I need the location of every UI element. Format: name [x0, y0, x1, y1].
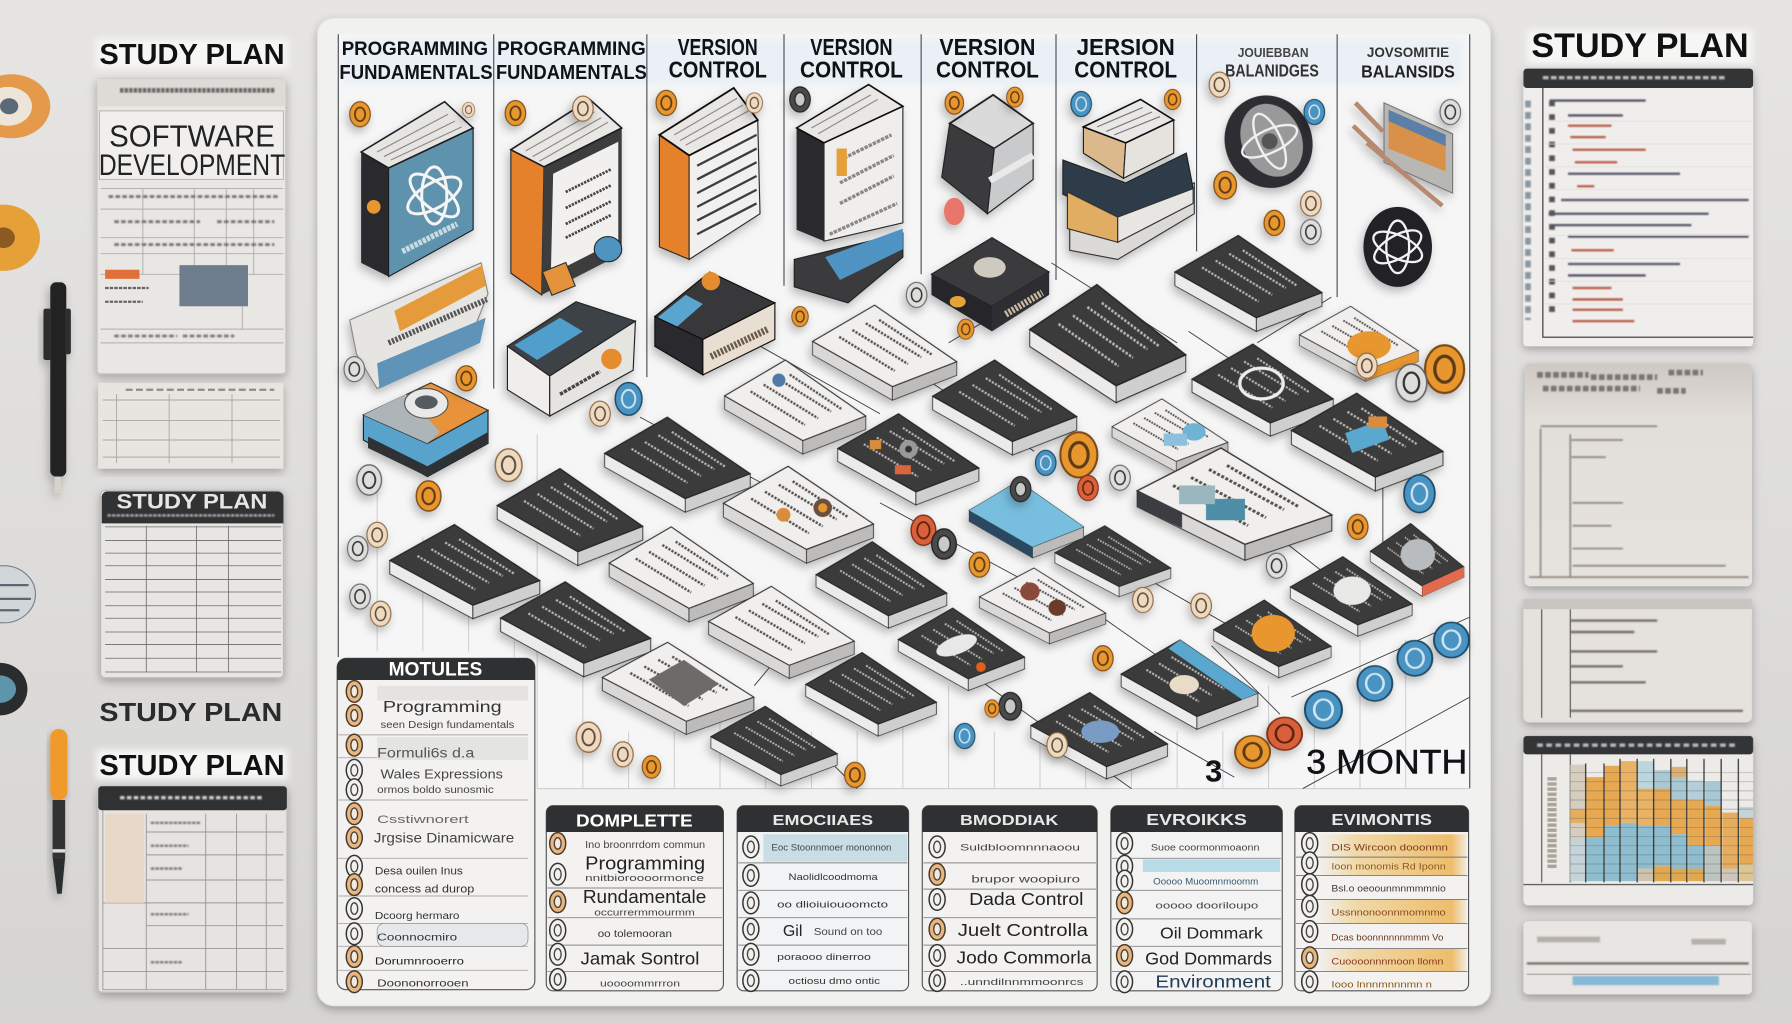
- list panel: modules: Dorumnrooerro: [375, 957, 464, 968]
- slab 18: [1214, 600, 1331, 678]
- list panel: modules: concess ad durop: [375, 884, 474, 896]
- right sidebar: [1523, 27, 1753, 994]
- slab 6: [933, 360, 1077, 455]
- header: bmoddak: BMODDIAK: [960, 813, 1059, 829]
- card: r3 faded: [1523, 599, 1752, 722]
- list panel: emodiaes: Sound on too: [814, 927, 883, 938]
- bars: [1570, 759, 1753, 882]
- icon: black pen: [43, 282, 71, 493]
- card: software development: [97, 79, 286, 374]
- list panel: evimontis: [1295, 806, 1469, 993]
- card: r2 faded: [1525, 363, 1752, 586]
- card: r4 stacked bars: [1523, 736, 1753, 905]
- label: 3 month: 3 MONTH: [1306, 744, 1467, 782]
- heading: study plan 1: STUDY PLAN: [99, 39, 285, 71]
- list panel: emodiaes: Naolidlcoodmoma: [789, 872, 879, 882]
- list panel: evimontis: Iooo lnnnmnnnmn n: [1331, 979, 1432, 989]
- box: blue top: [507, 302, 635, 416]
- column headings: CONTROL: [936, 57, 1039, 83]
- header: evroikks: EVROIKKS: [1146, 812, 1247, 829]
- slab 3: [605, 417, 750, 512]
- list panel: modules: Dcoorg hermaro: [375, 911, 460, 922]
- heading: study plan right: STUDY PLAN: [1531, 27, 1749, 65]
- list panel: evimontis: Dcas boonnnnnnmmm Vo: [1331, 933, 1443, 943]
- list panel: emodiaes: oo dlioiuiouoomcto: [777, 899, 888, 909]
- box: orange blue bundle: [350, 263, 488, 389]
- list panel: emodiaes: Gil: [783, 923, 802, 940]
- icon: disc: [1209, 81, 1328, 203]
- slab 23 white: [602, 642, 754, 734]
- list panel: emodiaes: poraooo dinerroo: [777, 952, 871, 962]
- header: evimontis: EVIMONTIS: [1331, 812, 1432, 829]
- screenshot: [179, 265, 248, 306]
- list panel: bmoddak: Jodo Commorla: [957, 947, 1092, 967]
- list panel: modules: Desa ouilen Inus: [375, 865, 463, 877]
- column headings: BALANSIDS: [1361, 62, 1455, 82]
- icon: pebble grey: [0, 566, 35, 623]
- row text: Programming: [585, 853, 705, 874]
- row text: Suoe coormonmoaonn: [1151, 842, 1259, 852]
- slab 12: [898, 608, 1025, 691]
- slab 2: [497, 469, 643, 566]
- card: r1 list: [1523, 69, 1753, 346]
- list panel: domplette: nnitbioroooormonce: [585, 873, 704, 883]
- pebbles: [344, 72, 1469, 787]
- slab 8: [1175, 235, 1322, 331]
- list panel: evroikks: ooooo dooriloupo: [1155, 901, 1258, 911]
- heading: study plan 3: STUDY PLAN: [99, 750, 285, 782]
- list panel: modules: Formuli6s d.a: [377, 746, 475, 761]
- list panel: evimontis: Ussnnonoonnmomnmo: [1331, 907, 1446, 917]
- list panel: evimontis: Ioon monomis Rd Iponn: [1331, 862, 1446, 872]
- list panel: modules: Csstiwnorert: [377, 814, 470, 826]
- list panel: domplette: Rundamentale: [583, 886, 706, 907]
- slab 16: [1031, 693, 1168, 779]
- slab 21 white: [609, 527, 753, 622]
- slab 31 blue: [969, 481, 1084, 558]
- heading: programming fundamentals: PROGRAMMING: [342, 38, 488, 60]
- list panel: evimontis: Cuoooonnnmoon llomn: [1331, 957, 1443, 967]
- slab 1: [390, 525, 540, 619]
- stack: blue orange books: [363, 383, 488, 477]
- heading: version control: VERSION: [678, 34, 758, 60]
- list panel: bmoddak: ..unndilnnmmoonrcs: [960, 977, 1084, 987]
- list panel: domplette: uoooommrrron: [600, 978, 680, 988]
- list panel: evimontis: Bsl.o oeoounmnmmmnio: [1331, 883, 1446, 893]
- list panel: evroikks: Ooooo Muoomnmoomm: [1153, 877, 1258, 887]
- icon: atom pebble: [1363, 207, 1432, 287]
- heading: blurred 7: JOUIEBBAN: [1238, 46, 1309, 60]
- heading: version control 2: VERSION: [810, 34, 893, 60]
- lower pebbles: [576, 432, 1368, 787]
- label: 3: 3: [1205, 754, 1222, 789]
- heading: jersion control: JERSION: [1077, 34, 1175, 60]
- heading: programming fundamentals 2: PROGRAMMING: [497, 38, 646, 60]
- book 2: orange spine: [511, 99, 622, 295]
- list panel: domplette: Ino broonrrdom commun: [585, 840, 705, 851]
- column headings: BALANIDGES: [1225, 61, 1319, 81]
- list panel: bmoddak: [922, 806, 1097, 991]
- list panel: domplette: Jamak Sontrol: [581, 949, 699, 969]
- slab 26 white: [813, 305, 957, 400]
- column rules: [338, 34, 1470, 789]
- list panel: emodiaes: [737, 806, 909, 991]
- card: software development: DEVELOPMENT: [99, 149, 285, 182]
- header: motules: MOTULES: [389, 658, 482, 680]
- header: emociiaes: EMOCIIAES: [773, 813, 873, 829]
- column headings: FUNDAMENTALS: [496, 61, 647, 84]
- box: silver black lower: [931, 238, 1049, 331]
- slab 25 white: [725, 360, 866, 454]
- list panel: modules: Wales Expressions: [381, 767, 503, 781]
- slab 5 detail: [870, 440, 918, 474]
- list panel: domplette: occurrermmourmm: [594, 907, 695, 917]
- row text: Programming: [383, 699, 502, 716]
- heading: version control 3: VERSION: [939, 34, 1035, 60]
- header text: STUDY PLAN: [117, 489, 267, 514]
- column headings: CONTROL: [669, 57, 767, 83]
- header halo: [343, 39, 1463, 85]
- box: black top: [655, 272, 775, 375]
- slab 10: [1291, 393, 1443, 491]
- slab 24 white: [723, 466, 873, 563]
- list panel: evroikks: Environment: [1155, 971, 1271, 991]
- icon: pebble amber: [0, 205, 40, 271]
- list panel: bmoddak: Juelt Controlla: [958, 920, 1089, 940]
- icon: pebble orange: [0, 74, 50, 138]
- slab 15: [806, 653, 936, 736]
- slab 5: [838, 414, 979, 505]
- card: study plan table: [101, 489, 283, 678]
- list panel: modules: Coonnocmiro: [377, 933, 458, 944]
- slab 11: [816, 542, 947, 628]
- row text: Eoc Stoonnmoer mononnon: [771, 842, 891, 852]
- book 3: orange spine, ruled: [659, 88, 760, 259]
- slab 20: [1370, 523, 1464, 596]
- list panel: bmoddak: brupor woopiuro: [971, 874, 1080, 885]
- slab 9: [1192, 344, 1333, 436]
- slab 30 white orange: [1299, 306, 1418, 381]
- card: table strip: [98, 383, 283, 469]
- card: r5 strip: [1523, 921, 1752, 994]
- list panel: evroikks: God Dommards: [1145, 949, 1272, 969]
- slab 4: [501, 582, 651, 677]
- slab 7 big: [1030, 285, 1186, 403]
- slab 27 white: [979, 568, 1106, 644]
- list panel: modules: Doononorrooen: [377, 978, 469, 989]
- stack: version control: [1063, 99, 1194, 259]
- column headings: CONTROL: [800, 57, 903, 83]
- image card: collage: [1353, 103, 1453, 206]
- row text: Suldbloomnnnaoou: [960, 842, 1080, 852]
- slab 17: [1121, 640, 1258, 729]
- slab 22 white: [709, 586, 854, 678]
- title text: SOFTWARE: [109, 118, 275, 153]
- isometric slabs: [390, 235, 1464, 786]
- heading: blurred 8: JOVSOMITIE: [1367, 45, 1449, 60]
- list panel: bmoddak: Dada Control: [969, 889, 1083, 909]
- list panel: evroikks: [1111, 806, 1282, 993]
- big coloured pebbles: [1235, 622, 1469, 768]
- list panel: modules: Jrgsise Dinamicware: [374, 830, 515, 845]
- slab 29 light complex: [1137, 448, 1332, 560]
- list panel: modules: [337, 658, 535, 993]
- icon: pebble dark: [0, 663, 27, 715]
- list panel: modules: ormos boldo sunosmic: [377, 785, 494, 796]
- list panel: domplette: oo tolemooran: [598, 929, 672, 940]
- left sidebar: [0, 39, 288, 992]
- row text: DIS Wircoon dooonmn: [1331, 842, 1448, 852]
- middle pebbles: [344, 282, 1464, 626]
- card: study plan grid: [98, 786, 287, 992]
- list panel: modules: seen Design fundamentals: [381, 720, 514, 731]
- icon: orange pen: [50, 729, 67, 894]
- slab 14: [711, 706, 837, 786]
- top row pebbles: [350, 72, 1461, 245]
- column headings: FUNDAMENTALS: [339, 61, 493, 84]
- column headings: [339, 34, 1455, 84]
- list panel: emodiaes: octiosu dmo ontic: [789, 976, 881, 986]
- slab 28 white: [1112, 399, 1228, 472]
- list panel: evroikks: Oil Dommark: [1160, 925, 1264, 942]
- column headings: CONTROL: [1074, 57, 1177, 83]
- header: domplette: DOMPLETTE: [576, 810, 693, 830]
- main panel: [318, 18, 1490, 1006]
- slab 13: [1055, 526, 1171, 597]
- heading: study plan 2: STUDY PLAN: [99, 697, 282, 727]
- list panel: domplette: [546, 806, 723, 991]
- slab 19: [1290, 557, 1412, 636]
- book 4: dark spine with slab: [794, 85, 903, 303]
- book 1: blue: [361, 102, 473, 277]
- device: version control: [942, 95, 1033, 225]
